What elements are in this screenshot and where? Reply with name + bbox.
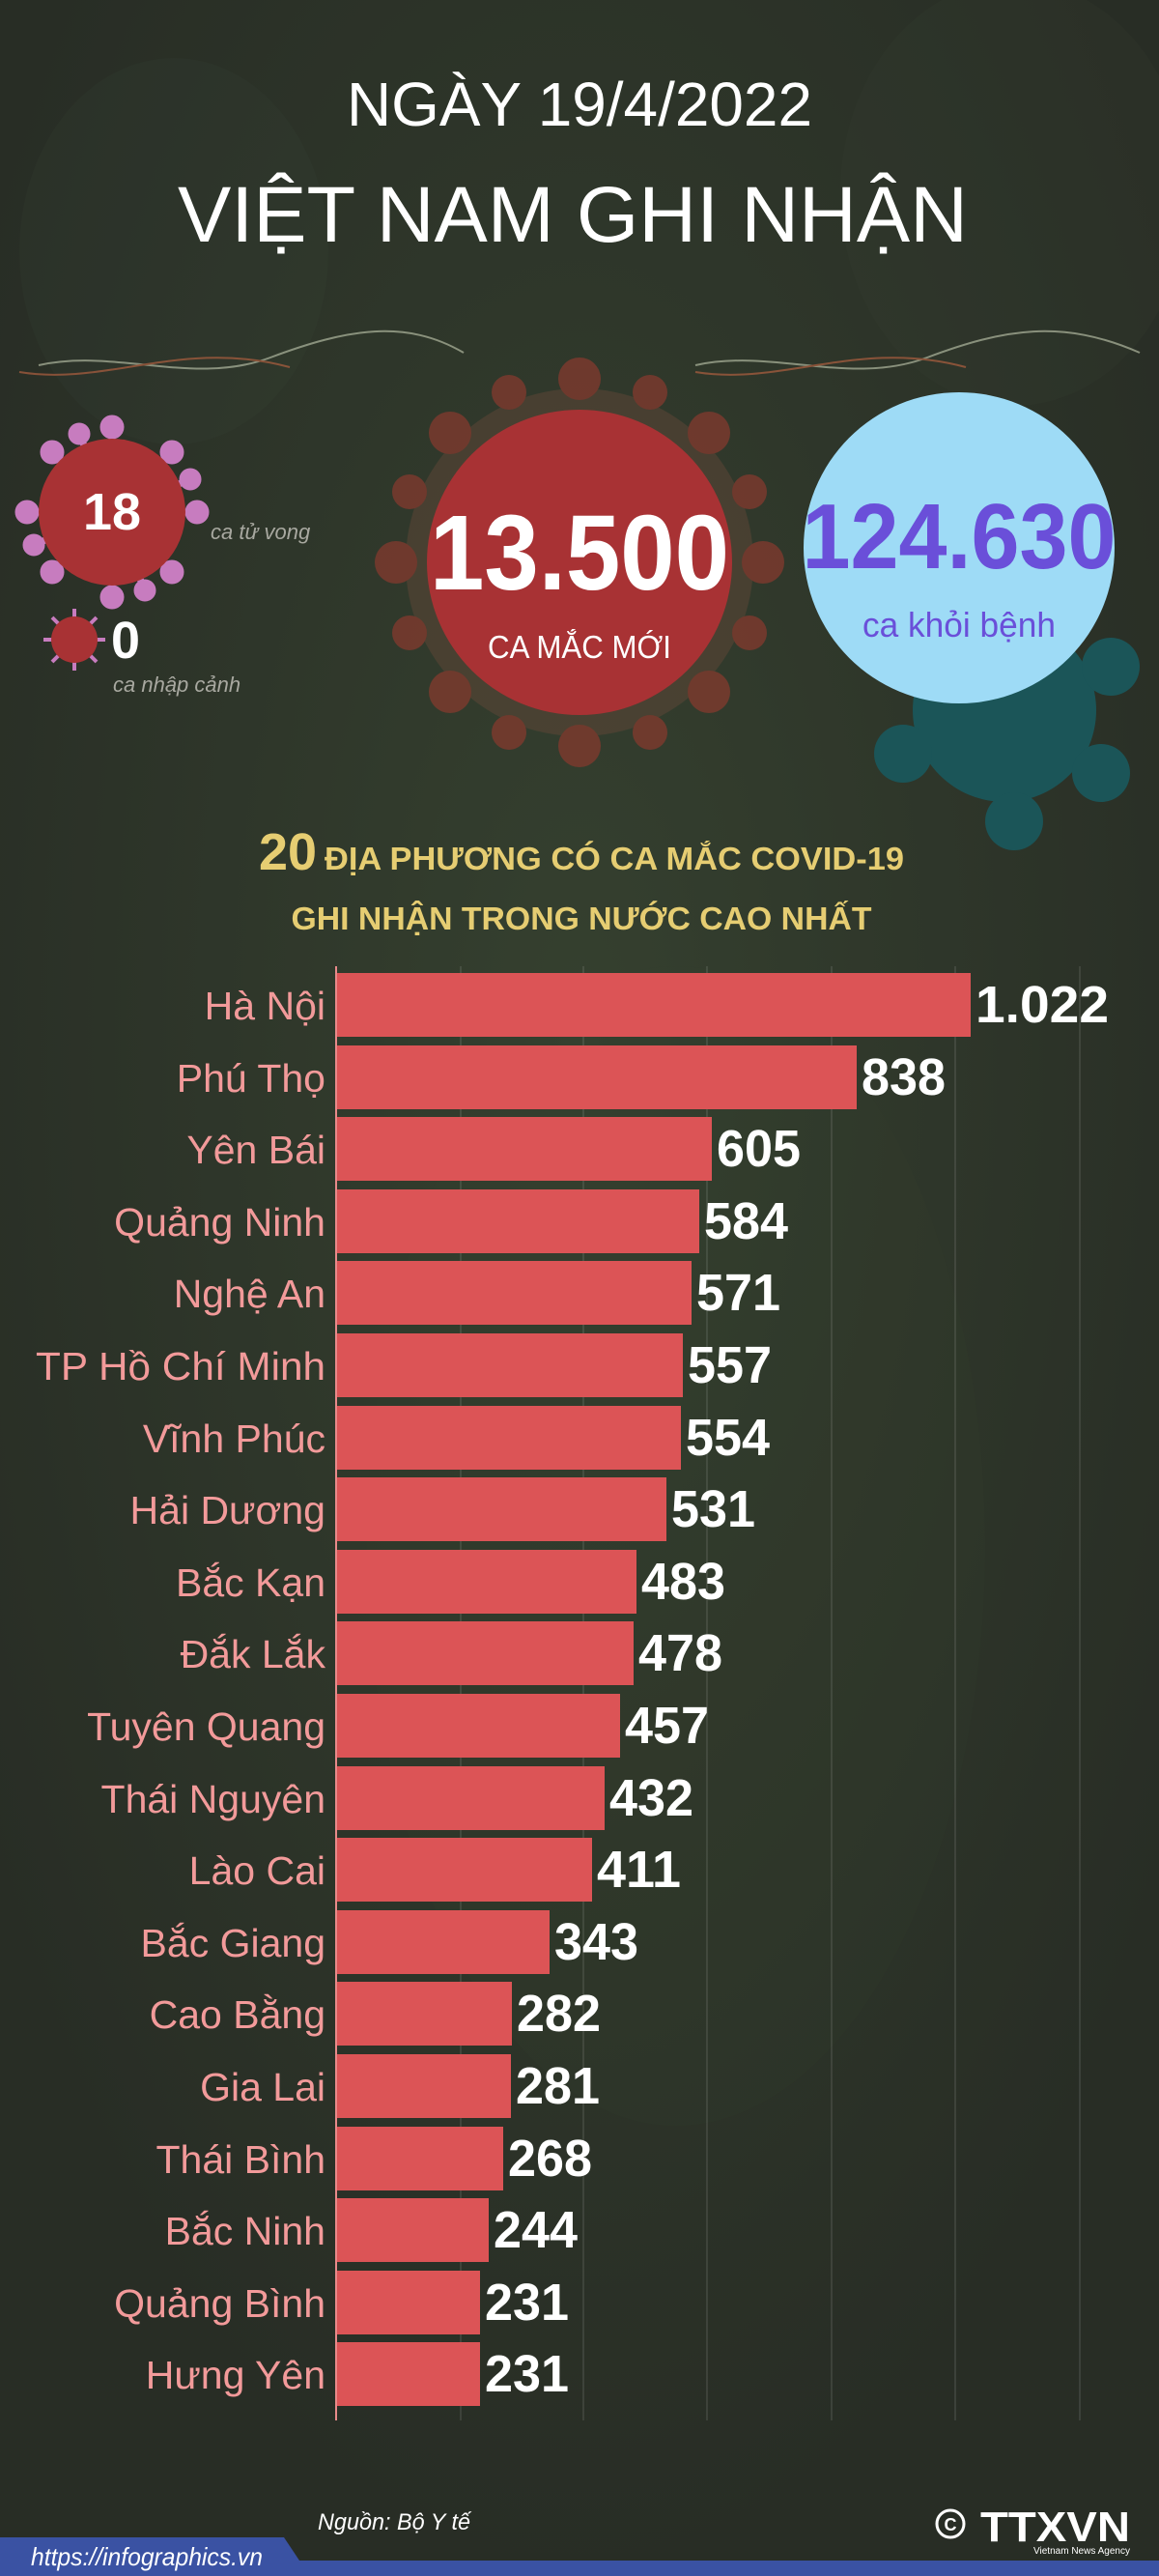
bar chart: 268 xyxy=(508,2130,592,2188)
bar chart: Vĩnh Phúc xyxy=(143,1417,325,1461)
bar chart: 231 xyxy=(485,2274,569,2332)
bar chart: 231 xyxy=(485,2345,569,2403)
bar chart: Quảng Ninh xyxy=(114,1200,325,1245)
bar chart: Hưng Yên xyxy=(146,2353,325,2397)
logo: TTXVN: Vietnam News Agency xyxy=(1033,2546,1130,2557)
chart heading xyxy=(259,823,904,936)
stat: deaths: ca tử vong xyxy=(211,520,311,544)
bar chart: 282 xyxy=(517,1985,601,2043)
bar chart xyxy=(36,966,1109,2420)
bar chart: Nghệ An xyxy=(174,1272,325,1316)
bar chart: 557 xyxy=(688,1336,772,1394)
icon: teal virus xyxy=(874,618,1140,850)
bar chart: Hà Nội xyxy=(205,984,325,1028)
bar chart: 343 xyxy=(554,1913,638,1971)
bar chart: Quảng Bình xyxy=(114,2281,325,2326)
bar chart: 457 xyxy=(625,1697,709,1755)
bar chart: 1.022 xyxy=(975,976,1109,1034)
title: main: VIỆT NAM GHI NHẬN xyxy=(178,171,968,259)
bar chart: Phú Thọ xyxy=(177,1056,325,1101)
stat: imported xyxy=(43,609,240,697)
bar chart: Đắk Lắk xyxy=(181,1632,325,1676)
bar chart: 281 xyxy=(516,2057,600,2115)
bar chart: 432 xyxy=(609,1769,693,1827)
icon: virus pink xyxy=(18,418,206,606)
stat: imported: 0 xyxy=(111,612,140,670)
bar chart: 554 xyxy=(686,1409,770,1467)
chart heading: 20ĐỊA PHƯƠNG CÓ CA MẮC COVID-19 xyxy=(259,823,904,881)
icon: brown virus halo xyxy=(375,358,784,767)
stat: imported: ca nhập cảnh xyxy=(113,673,240,697)
bar chart: Tuyên Quang xyxy=(87,1704,325,1749)
bar chart: Lào Cai xyxy=(189,1848,325,1893)
stat: recovered: 124.630 xyxy=(802,485,1117,588)
stat: recovered: ca khỏi bệnh xyxy=(862,605,1056,644)
stat: recovered xyxy=(802,392,1140,850)
chart heading: GHI NHẬN TRONG NƯỚC CAO NHẤT xyxy=(292,901,871,936)
bar chart: Bắc Giang xyxy=(141,1921,325,1965)
bar chart: 478 xyxy=(638,1624,722,1682)
bar chart: Cao Bằng xyxy=(150,1992,325,2037)
bar chart: 571 xyxy=(696,1264,780,1322)
decorative wave lines xyxy=(19,331,1140,375)
stat: new cases: 13.500 xyxy=(430,494,729,613)
source note: Nguồn: Bộ Y tế xyxy=(318,2509,472,2535)
stat: deaths: 18 xyxy=(83,483,141,541)
bar chart: 531 xyxy=(671,1480,755,1538)
bar chart: Thái Nguyên xyxy=(101,1777,325,1821)
bar chart: TP Hồ Chí Minh xyxy=(36,1344,325,1388)
stat: new cases: CA MẮC MỚI xyxy=(488,629,671,665)
bar chart: 411 xyxy=(597,1841,681,1899)
bar chart: 483 xyxy=(641,1553,725,1611)
bar chart: Yên Bái xyxy=(186,1128,325,1172)
bar chart: Gia Lai xyxy=(200,2065,325,2109)
stat: deaths xyxy=(18,418,311,606)
stat: new cases xyxy=(375,358,784,767)
bar chart: 244 xyxy=(494,2201,578,2259)
title: date: NGÀY 19/4/2022 xyxy=(347,70,812,139)
footer bar: https://infographics.vn xyxy=(31,2542,263,2571)
footer bar xyxy=(0,2537,1159,2576)
logo: TTXVN: C xyxy=(945,2515,956,2534)
bar chart: Bắc Ninh xyxy=(165,2209,325,2253)
bar chart: 584 xyxy=(704,1192,788,1250)
logo: TTXVN xyxy=(937,2504,1130,2557)
bar chart: Bắc Kạn xyxy=(176,1560,325,1605)
logo: TTXVN: TTXVN xyxy=(980,2504,1130,2551)
bar chart: Thái Bình xyxy=(156,2137,325,2182)
bar chart: 605 xyxy=(717,1120,801,1178)
bar chart: 838 xyxy=(862,1048,946,1106)
icon: small virus xyxy=(43,609,105,671)
bar chart: Hải Dương xyxy=(130,1488,325,1532)
